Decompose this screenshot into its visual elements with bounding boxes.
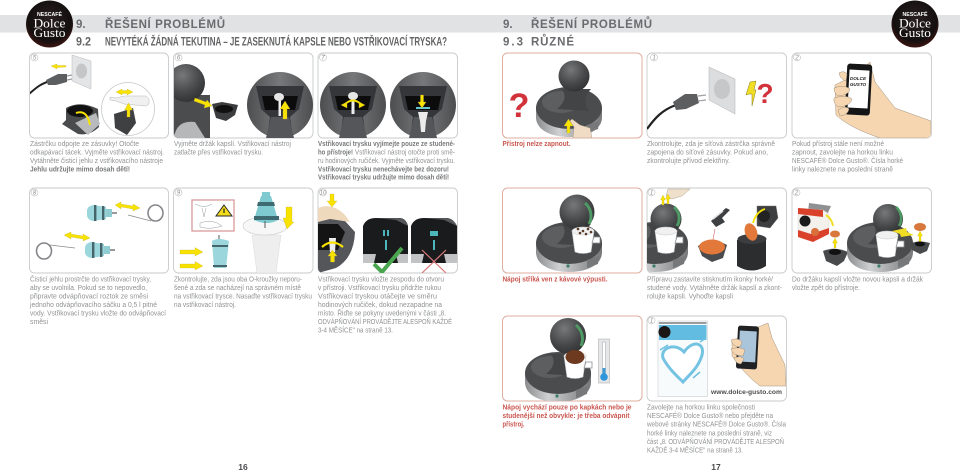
text: hotline and website: KAŽDÉ 3-4 MĚSÍCE" na straně 13. bbox=[647, 446, 743, 455]
panel: step 5: 5 bbox=[33, 56, 37, 62]
panel: phone hotline bbox=[792, 53, 932, 138]
text: step 5: Vytáhněte čisticí jehlu z vstřikovacího nástroje bbox=[30, 158, 163, 165]
text: step 6: Vyjměte držák kapslí. Vstřikovací nástroj bbox=[174, 141, 291, 148]
panel: phone hotline: DOLCE bbox=[850, 76, 867, 81]
page number 17: 17 bbox=[711, 462, 721, 472]
text: phone hotline: zapnout, zavolejte na horkou linku bbox=[792, 150, 893, 156]
panel: hotline and website: 1 bbox=[650, 318, 653, 324]
text: step 10: 3-4 MĚSÍCE" na straně 13. bbox=[318, 326, 393, 334]
text: insert new capsule: vložte zpět do přístroje. bbox=[792, 285, 860, 292]
text: step 10: Vstřikovací trysku vložte zespodu do otvoru bbox=[318, 276, 444, 284]
text: check socket: zkontrolujte přívod elektřiny. bbox=[647, 158, 730, 165]
heading: right page bbox=[503, 17, 652, 48]
text: hotline and website bbox=[646, 404, 786, 455]
text: check socket: Zkontrolujte, zda je síťová zástrčka správně bbox=[647, 141, 775, 148]
text: phone hotline: linky naleznete na poslední straně bbox=[792, 166, 893, 174]
text: hotline and website: horké linky naleznete na poslední straně, viz bbox=[647, 430, 772, 437]
text: step 5 bbox=[30, 141, 164, 174]
text: drink sprays from outlet: Nápoj stříká ven z kávové výpusti. bbox=[502, 276, 608, 284]
panel: step 8 bbox=[30, 188, 168, 273]
heading: left page: NEVYTÉKÁ ŽÁDNÁ TEKUTINA – JE ZASEKNUTÁ KAPSLE NEBO VSTŘIKOVACÍ TRYSKA? bbox=[105, 36, 447, 48]
text: step 9: na vstřikovací trysce. Nasaďte vstřikovací trysku bbox=[174, 294, 312, 300]
header band bbox=[0, 15, 960, 32]
panel: check socket: ? bbox=[756, 78, 774, 109]
logo: right page: Gusto bbox=[899, 25, 931, 40]
panel: drops only, needs descaling bbox=[502, 316, 642, 402]
logo: left page: Gusto bbox=[34, 25, 66, 40]
text: step 7: Vstřikovací nástroj otočte proti smě- bbox=[355, 150, 456, 156]
panel: insert new capsule bbox=[792, 188, 932, 273]
text: check socket: zapojena do síťové zásuvky. Pokud ano, bbox=[647, 150, 768, 156]
panel: check socket: 1 bbox=[652, 56, 656, 62]
panel: insert new capsule: 2 bbox=[794, 190, 799, 196]
text: drops only, needs descaling: přístroj. bbox=[502, 422, 525, 429]
heading: left page: 9.2 bbox=[76, 36, 91, 48]
logo: left page: NESCAFÉ bbox=[37, 10, 62, 18]
text: step 10: ODVÁPŇOVÁNÍ PROVÁDĚJTE ALESPOŇ KAŽDÉ bbox=[318, 317, 452, 326]
logo: right page: NESCAFÉ bbox=[902, 10, 928, 18]
text: step 8: aby se uvolnila. Pokud se to nepovedlo, bbox=[30, 285, 147, 292]
text: step 5: odkapávací tácek. Vyjměte vstřikovací nástroj. bbox=[30, 150, 164, 156]
panel: step 10: 10 bbox=[320, 190, 327, 196]
panel: machine will not switch on bbox=[502, 53, 642, 138]
panel: machine will not switch on: ? bbox=[509, 87, 529, 125]
logo: left page bbox=[26, 0, 73, 48]
text: stop and remove capsule bbox=[647, 276, 783, 300]
text: phone hotline: NESCAFÉ® Dolce Gusto®. Čísla horké bbox=[792, 156, 903, 165]
text: step 9: šené a zda se nacházejí na správném místě bbox=[174, 285, 301, 292]
heading: right page: ŘEŠENÍ PROBLÉMŮ bbox=[531, 17, 652, 31]
text: step 9 bbox=[174, 276, 312, 309]
text: stop and remove capsule: Přípravu zastavíte stisknutím ikonky horké/ bbox=[647, 276, 773, 284]
text: step 8: směsi bbox=[30, 319, 48, 326]
text: drops only, needs descaling bbox=[502, 404, 632, 429]
text: hotline and website: Zavolejte na horkou linku společnosti bbox=[647, 404, 755, 412]
text: stop and remove capsule: studené vody. Vytáhněte držák kapslí a zkont- bbox=[647, 285, 783, 292]
heading: right page: 9.3 bbox=[503, 36, 523, 48]
panel: phone hotline: GUSTO bbox=[850, 82, 867, 87]
panel: step 10 bbox=[318, 188, 458, 273]
panel: step 7 bbox=[318, 53, 458, 138]
panel: step 9 bbox=[174, 188, 313, 273]
text: step 7: Vstřikovací trysku udržujte mimo dosah dětí! bbox=[318, 174, 449, 182]
text: hotline and website: webové stránky NESCAFÉ® Dolce Gusto®. Čísla bbox=[646, 420, 786, 429]
text: step 9: na vstřikovací nástroj. bbox=[174, 302, 236, 309]
logo: left page: Dolce bbox=[34, 16, 66, 30]
heading: right page: 9. bbox=[503, 19, 513, 31]
panel: step 8: 8 bbox=[33, 190, 37, 196]
panel: step 7: 7 bbox=[321, 56, 325, 62]
text: step 8: jednoho odvápňovacího sáčku a 0,5 l pitné bbox=[29, 302, 157, 309]
panel: step 9: 9 bbox=[177, 190, 181, 196]
text: insert new capsule bbox=[792, 276, 923, 292]
text: step 10: v přístroji. Vstřikovací trysku přidržte rukou bbox=[318, 285, 441, 292]
panel: check socket bbox=[647, 53, 786, 138]
text: hotline and website: NESCAFÉ® Dolce Gusto® nebo přejděte na bbox=[647, 411, 773, 420]
text: step 10 bbox=[318, 276, 452, 334]
text: drops only, needs descaling: Nápoj vychází pouze po kapkách nebo je bbox=[502, 404, 632, 412]
panel: step 5 bbox=[29, 53, 168, 138]
text: step 8: vody. Vstřikovací trysku vložte do odvápňovací bbox=[30, 310, 166, 318]
text: step 7: Vstřikovací trysku vyjímejte pouze ze studené- bbox=[318, 141, 456, 148]
text: step 5: Zástrčku odpojte ze zásuvky! Otočte bbox=[30, 141, 139, 148]
text: step 7: ru hodinových ručiček. Vyjměte vstřikovací trysku. bbox=[318, 158, 455, 165]
page number 16: 16 bbox=[238, 462, 248, 472]
text: step 10: Vstřikovací tryskou otáčejte ve směru bbox=[318, 294, 437, 300]
heading: left page: 9. bbox=[76, 19, 86, 31]
text: step 5: Jehlu udržujte mimo dosah dětí! bbox=[30, 166, 130, 174]
logo: right page bbox=[892, 0, 938, 48]
text: step 9: Zkontrolujte, zda jsou oba O-kroužky neporu- bbox=[174, 276, 303, 284]
text: insert new capsule: Do držáku kapslí vložte novou kapsli a držák bbox=[792, 276, 923, 284]
panel: drink sprays from outlet bbox=[502, 188, 642, 273]
panel: stop and remove capsule bbox=[646, 188, 787, 274]
logo: right page: Dolce bbox=[899, 16, 931, 30]
text: phone hotline bbox=[792, 141, 903, 174]
text: step 7: Vstřikovací trysku nenechávejte bez dozoru! bbox=[318, 166, 449, 174]
panel: hotline and website: www.dolce-gusto.com bbox=[710, 389, 782, 396]
text: step 8 bbox=[29, 274, 166, 326]
heading: left page: ŘEŠENÍ PROBLÉMŮ bbox=[105, 17, 225, 31]
heading: left page bbox=[76, 17, 447, 48]
text: step 8: připravte odvápňovací roztok ze směsi bbox=[30, 294, 148, 300]
text: step 7 bbox=[318, 141, 456, 182]
text: step 10: místo. Řiďte se pokyny uvedenými v části „8. bbox=[318, 308, 446, 318]
panel: step 6 bbox=[167, 53, 313, 138]
text: step 6 bbox=[174, 141, 291, 156]
text: hotline and website: část „8. ODVÁPŇOVÁNÍ PROVÁDĚJTE ALESPOŇ bbox=[647, 437, 784, 446]
text: step 8: Čisticí jehlu prostrčte do vstřikovací trysky, bbox=[30, 274, 151, 284]
text: drops only, needs descaling: studenější než obvykle: je třeba odvápnit bbox=[502, 413, 630, 420]
text: check socket bbox=[647, 141, 775, 165]
heading: right page: RŮZNÉ bbox=[531, 34, 574, 48]
panel: phone hotline: 2 bbox=[794, 56, 799, 62]
text: phone hotline: Pokud přístroj stále není možné bbox=[792, 141, 884, 148]
panel: step 6: 6 bbox=[177, 56, 181, 62]
text: machine will not switch on: Přístroj nelze zapnout. bbox=[502, 141, 571, 148]
panel: stop and remove capsule: 1 bbox=[650, 190, 653, 196]
text: step 6: zatlačte přes vstřikovací trysku. bbox=[174, 150, 263, 156]
text: step 10: hodinových ručiček, dokud nezapadne na bbox=[318, 302, 442, 309]
panel: hotline and website bbox=[647, 316, 786, 401]
text: stop and remove capsule: rolujte kapsli. Vyhoďte kapsli bbox=[647, 294, 733, 300]
text: step 7: ho přístroje! bbox=[318, 150, 353, 156]
